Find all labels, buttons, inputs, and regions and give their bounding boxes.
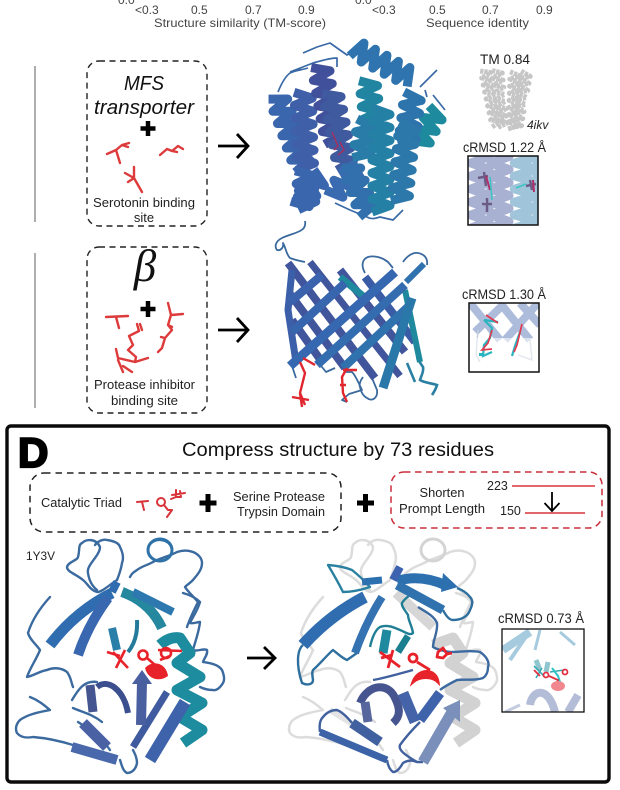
catalytic residues: [107, 648, 182, 668]
TM score label: TM 0.84: [480, 52, 530, 67]
panel D title: Compress structure by 73 residues: [182, 439, 494, 461]
reference structure thumbnail: 4ikv: [480, 69, 531, 129]
prompt box: shorten prompt length: [391, 472, 602, 528]
design loops: [298, 565, 489, 690]
axis tick labels: structure similarity: 0.5: [191, 3, 208, 17]
PDB label: 1Y3V: 1Y3V: [26, 551, 55, 563]
protein structure: native 1Y3V: [16, 539, 224, 773]
axis tick labels: structure similarity: <0.3: [135, 3, 159, 17]
native ghost: [289, 539, 497, 773]
axis tick labels: structure similarity: 0.9: [298, 3, 315, 17]
axis tick labels: structure similarity: 0.7: [245, 3, 262, 17]
arrow: beta prompt to structure: [218, 318, 248, 342]
length labels and lines: 223: [487, 479, 508, 493]
top coil: [148, 539, 172, 561]
cRMSD label: 1.30: cRMSD 1.30 Å: [462, 287, 546, 302]
cRMSD label: 1.22: cRMSD 1.22 Å: [463, 140, 546, 155]
inset: beta barrel binding site overlay: [469, 303, 540, 372]
axis tick labels: sequence identity: [355, 0, 553, 17]
PDB label: 4ikv: 4ikv: [527, 118, 549, 132]
protein structure: beta barrel: [276, 221, 437, 407]
prompt box: beta barrel: binding site: [111, 393, 178, 408]
label: catalytic triad: Catalytic Triad: [41, 495, 122, 510]
panel letter D: D: [18, 429, 48, 476]
icon: serotonin binding residues: [107, 143, 183, 192]
strands: [50, 593, 112, 645]
axis title: structure similarity: Structure similarity (TM-score): [154, 16, 326, 30]
side strands: [288, 270, 296, 362]
axis title: sequence identity: Sequence identity: [426, 16, 529, 30]
prompt box: MFS transporter: [87, 61, 207, 226]
cRMSD label: 0.73: cRMSD 0.73 Å: [498, 611, 584, 626]
heading: MFS transporter: MFS: [124, 73, 165, 95]
prompt box: shorten prompt length: Prompt Length: [399, 501, 485, 516]
axis tick labels: structure similarity: [118, 0, 315, 17]
teal helix: [160, 638, 202, 743]
inset: MFS binding site overlay: [468, 150, 538, 230]
caption: serotonin binding site: Serotonin binding: [93, 195, 195, 210]
front strands: [290, 264, 424, 388]
axis tick labels: sequence identity: 0.9: [536, 3, 553, 17]
bound ligand sticks: [332, 132, 344, 155]
prompt box: catalytic triad and domain: [30, 473, 341, 532]
catalytic residues: [380, 648, 452, 670]
back strands: [288, 262, 415, 378]
lower strands: [150, 702, 185, 760]
prompt box: beta barrel: [87, 241, 207, 413]
group bracket line: MFS row: [34, 66, 36, 222]
plus sign between prompts: [357, 494, 374, 512]
panel D frame: [7, 426, 609, 782]
arrow: MFS prompt to structure: [218, 134, 248, 158]
lower strands: [360, 687, 399, 723]
plus sign: [200, 494, 216, 512]
caption: protease inhibitor binding site: Protease inhibitor: [94, 377, 196, 392]
prompt box: MFS transporter: transporter: [94, 97, 195, 119]
label: serine protease trypsin domain: Serine Protease: [233, 489, 325, 504]
arrow: shorten: [544, 492, 560, 511]
axis tick labels: sequence identity: 0.5: [429, 3, 446, 17]
plus sign: [140, 301, 156, 317]
icon: protease inhibitor residues: [106, 303, 183, 372]
plus sign: [140, 121, 156, 136]
prompt box: shorten prompt length: 150: [500, 504, 521, 518]
protein structure: compressed design with grey native overlay: [289, 539, 497, 773]
inset: compressed design active site overlay: [502, 629, 584, 712]
label: shorten prompt length: Shorten: [420, 485, 464, 500]
top strands: [397, 578, 445, 585]
red binding site residues: [292, 358, 357, 407]
prompt box: MFS transporter: site: [134, 210, 154, 225]
group bracket line: beta row: [34, 253, 36, 408]
protein structure: MFS transporter helices: [269, 40, 445, 220]
arrow: native to compressed: [247, 647, 275, 669]
heading: beta symbol: β: [133, 241, 157, 291]
N-terminal tail and loops: [276, 221, 427, 402]
prompt box: catalytic triad and domain: Trypsin Domain: [237, 504, 325, 519]
axis tick labels: sequence identity: 0.7: [482, 3, 499, 17]
axis tick labels: sequence identity: <0.3: [372, 3, 396, 17]
icon: catalytic triad residues: [137, 490, 185, 517]
